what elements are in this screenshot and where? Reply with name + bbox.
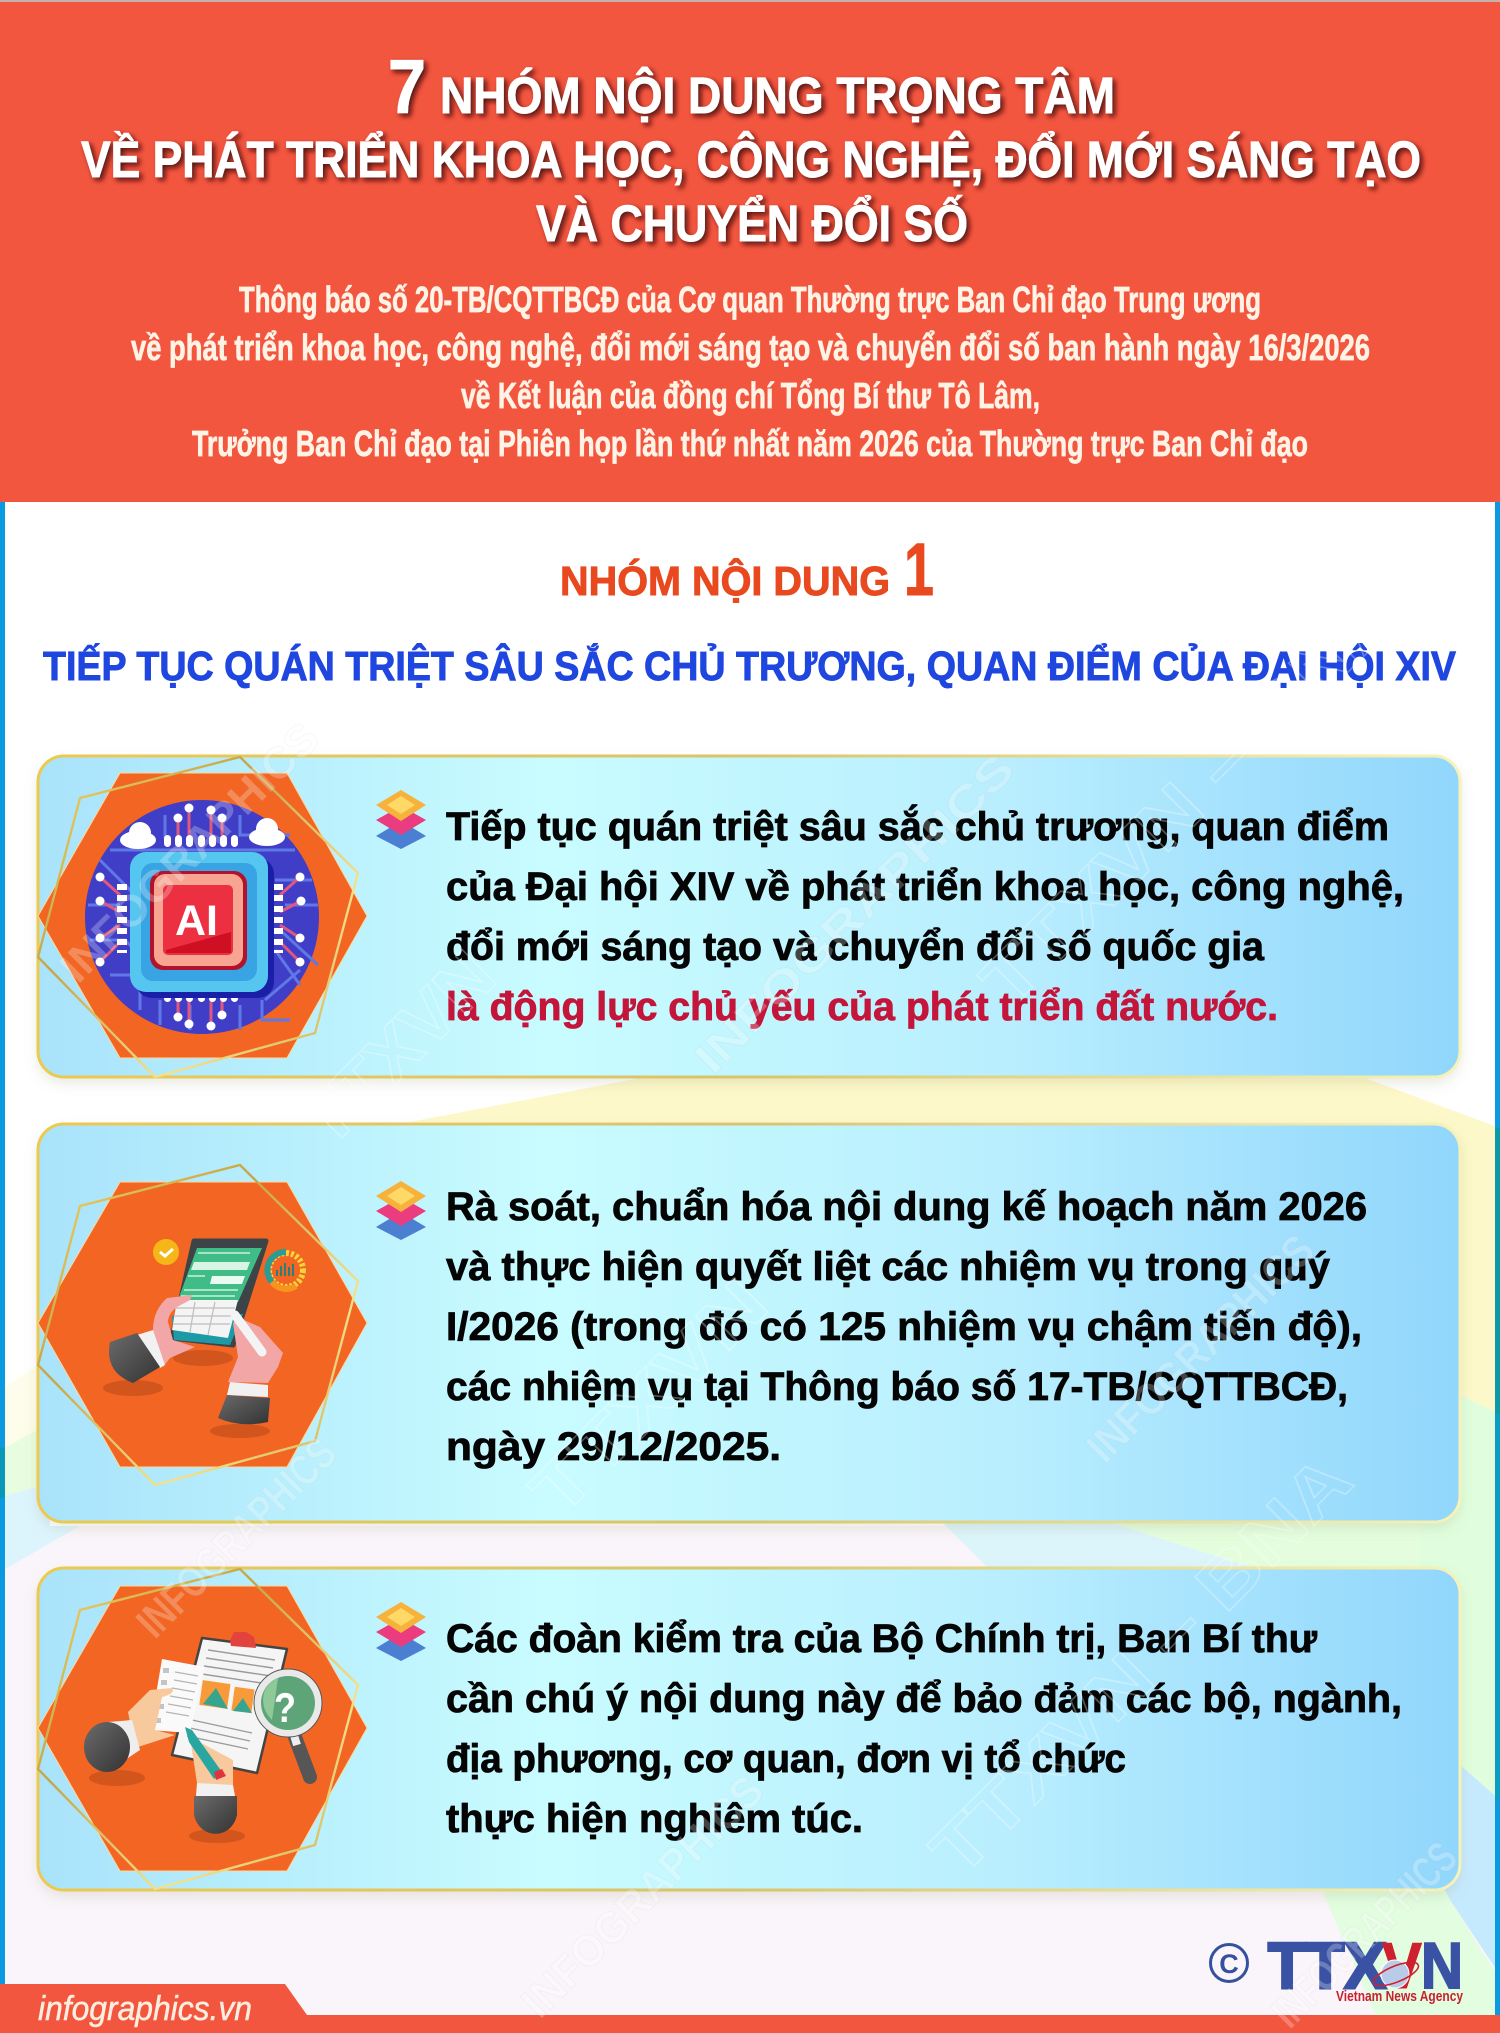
subtitle: về Kết luận của đồng chí Tổng Bí thư Tô Lâm, — [461, 375, 1040, 416]
title: 7 — [388, 45, 426, 130]
watermarks: TTXVN – BNA — [965, 569, 1417, 1021]
card 3 text: cần chú ý nội dung này để bảo đảm các bộ, ngành, — [446, 1677, 1402, 1721]
chip body — [136, 858, 274, 998]
card 3 text — [446, 1617, 1402, 1841]
hexagon background 1 — [38, 773, 367, 1058]
gauge — [267, 1252, 303, 1289]
card 2 text: các nhiệm vụ tại Thông báo số 17-TB/CQTTBCĐ, — [446, 1365, 1348, 1409]
clipboard — [172, 1638, 287, 1773]
card 3 text: địa phương, cơ quan, đơn vị tổ chức — [446, 1737, 1126, 1781]
left hand — [153, 1295, 195, 1367]
pink traces and nodes — [100, 808, 301, 1026]
icon: hands with documents and magnifier — [84, 1632, 322, 1843]
check badge — [153, 1239, 179, 1265]
gold hexagon outline 3 — [38, 1569, 358, 1889]
copyright and agency logo: N — [1421, 1929, 1463, 2002]
icon: hands with documents and magnifier: ? — [274, 1684, 296, 1731]
icon: hands with tablet — [103, 1239, 303, 1438]
copyright and agency logo: C — [1219, 1949, 1239, 1979]
right hand — [228, 1317, 283, 1383]
gold hexagon outline 1 — [38, 757, 358, 1077]
card 2 text — [446, 1185, 1367, 1469]
section heading: group 1 — [560, 528, 934, 611]
icon: layers 2 — [376, 1181, 426, 1240]
watermarks: INFOGRAPHICS — [1077, 1225, 1324, 1472]
hexagon background 2 — [38, 1182, 367, 1467]
loose sheet — [150, 1659, 205, 1733]
card 1 text: Tiếp tục quán triệt sâu sắc chủ trương, quan điểm — [446, 803, 1389, 849]
clouds — [120, 818, 285, 849]
magnifier — [295, 1737, 310, 1777]
panel: card 3 — [38, 1568, 1460, 1890]
hexagon background 3 — [38, 1586, 367, 1871]
icon: layers 1 — [376, 790, 426, 849]
card 2 text: ngày 29/12/2025. — [446, 1425, 781, 1469]
card 2 text: và thực hiện quyết liệt các nhiệm vụ trong quý — [446, 1245, 1331, 1289]
title — [81, 45, 1421, 252]
copyright and agency logo: TTX — [1268, 1929, 1386, 2002]
subtitle — [131, 279, 1370, 464]
section heading: group 1: 1 — [904, 528, 934, 611]
tablet — [172, 1241, 266, 1345]
left hand — [128, 1688, 175, 1748]
copyright and agency logo: V — [1382, 1929, 1422, 2002]
watermarks — [50, 569, 1467, 2033]
footer band — [0, 1984, 1500, 2033]
pictures — [199, 1680, 231, 1709]
card 1 text: là động lực chủ yếu của phát triển đất nước. — [446, 985, 1278, 1029]
icon: layers 3 — [376, 1602, 426, 1661]
watermarks: TTXVN — [515, 1263, 783, 1531]
card 1 text: của Đại hội XIV về phát triển khoa học, công nghệ, — [446, 865, 1404, 909]
watermarks: INFOGRAPHICS — [685, 744, 1024, 1083]
copyright and agency logo — [1210, 1929, 1464, 2005]
title: NHÓM NỘI DUNG TRỌNG TÂM — [440, 66, 1115, 124]
icon: AI chip — [85, 800, 319, 1034]
section heading: group 1: NHÓM NỘI DUNG — [560, 558, 890, 604]
title: VÀ CHUYỂN ĐỔI SỐ — [536, 194, 968, 252]
card 3 text: Các đoàn kiểm tra của Bộ Chính trị, Ban Bí thư — [446, 1617, 1317, 1661]
footer site name: infographics.vn — [38, 1990, 252, 2028]
card 1 text: đổi mới sáng tạo và chuyển đổi số quốc gia — [446, 925, 1265, 969]
watermarks: TTXVN – BNA — [915, 1439, 1367, 1891]
gold hexagon outline 2 — [38, 1165, 358, 1485]
copyright and agency logo: Vietnam News Agency — [1336, 1988, 1464, 2005]
panel: card 2 — [38, 1124, 1460, 1522]
watermarks: INFOGRAPHICS — [512, 1766, 773, 2027]
watermarks: INFOGRAPHICS — [127, 1429, 346, 1647]
AI label: AI — [175, 897, 218, 945]
right hand — [190, 1737, 233, 1787]
card 3 text: thực hiện nghiêm túc. — [446, 1797, 863, 1841]
header panel — [0, 0, 1500, 502]
card 2 text: I/2026 (trong đó có 125 nhiệm vụ chậm tiến độ), — [446, 1305, 1362, 1349]
card 2 text: Rà soát, chuẩn hóa nội dung kế hoạch năm 2026 — [446, 1185, 1367, 1229]
side edge bars — [0, 502, 1500, 2015]
card 1 text — [446, 803, 1404, 1029]
watermarks: INFOGRAPHICS — [50, 713, 329, 992]
watermarks: TTXVN — [285, 936, 510, 1161]
panel: card 1 — [38, 756, 1460, 1077]
